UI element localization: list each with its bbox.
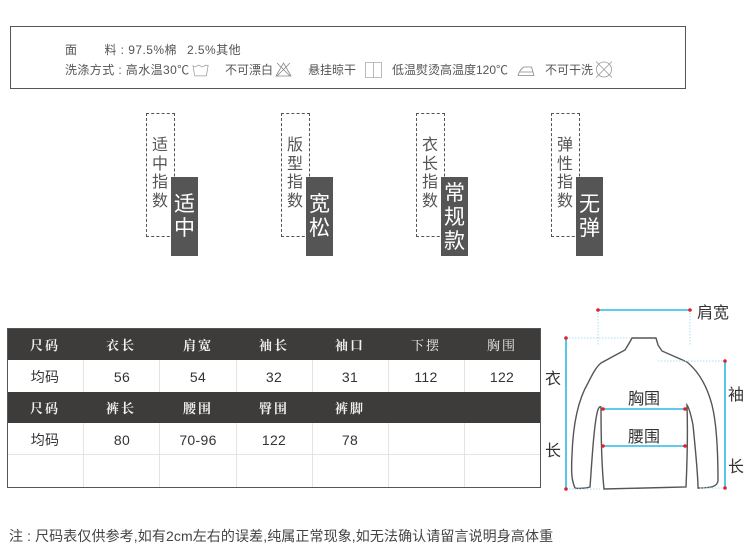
icon: hang dry square xyxy=(365,62,382,78)
index: cut xyxy=(281,113,333,256)
footnote: 注 : 尺码表仅供参考,如有2cm左右的误差,纯属正常现象,如无法确认请留言说明身高体重 xyxy=(9,528,553,544)
labels: 肩宽 xyxy=(697,304,729,322)
elasticity value: 无弹 xyxy=(579,193,600,240)
fabric composition text: 面 料 : 97.5%棉 2.5%其他 xyxy=(65,43,241,57)
labels: 袖 xyxy=(728,386,744,404)
table data row 1: 112 xyxy=(414,369,438,385)
fit value: 适中 xyxy=(174,193,195,240)
table data row 1: 32 xyxy=(266,369,282,385)
table header row 2: 裤长 xyxy=(106,401,136,416)
size table xyxy=(7,328,541,488)
label: no dry clean: 不可干洗 xyxy=(545,63,593,77)
labels: 长 xyxy=(545,442,561,460)
table data row 2 xyxy=(31,432,358,448)
index: elasticity xyxy=(551,113,603,256)
washing method: high water temperature: 洗涤方式 : 高水温30℃ xyxy=(65,63,190,77)
guide dots xyxy=(566,310,725,489)
index: length xyxy=(416,113,468,256)
cut value xyxy=(306,177,333,256)
icon: wash tub xyxy=(192,64,208,76)
labels: 长 xyxy=(728,458,744,476)
table header row 1: 袖长 xyxy=(259,338,289,353)
cut label: 版型指数 xyxy=(287,137,303,210)
elasticity label: 弹性指数 xyxy=(557,137,573,210)
table data row 1: 均码 xyxy=(31,369,59,385)
table data row 2: 78 xyxy=(342,432,358,448)
measurement diagram: jacket xyxy=(545,304,744,491)
table data row 2: 均码 xyxy=(31,432,59,448)
table data row 1: 54 xyxy=(190,369,206,385)
icon: iron xyxy=(518,66,534,76)
table data row 1: 122 xyxy=(490,369,514,385)
table header row 1: 下摆 xyxy=(411,338,441,353)
labels: 衣 xyxy=(545,370,561,388)
table header row 1: 袖口 xyxy=(335,338,365,353)
index: fit xyxy=(146,113,198,256)
table header row 2: 裤脚 xyxy=(335,401,365,416)
table header row 1: 衣长 xyxy=(106,338,136,353)
panel: fabric and washing info xyxy=(10,26,686,89)
table data row 1 xyxy=(31,369,514,385)
table header row 2 xyxy=(7,392,540,423)
table data row 1: 31 xyxy=(342,369,358,385)
label: hang dry: 悬挂晾干 xyxy=(308,63,356,77)
labels: 胸围 xyxy=(628,390,660,408)
labels xyxy=(545,304,744,476)
label: no bleach: 不可漂白 xyxy=(225,63,273,77)
table header row 1: 尺码 xyxy=(30,338,60,353)
length label: 衣长指数 xyxy=(422,137,438,210)
cyan measurement lines xyxy=(566,310,725,489)
table header row 1 xyxy=(7,329,540,360)
table data row 2: 70-96 xyxy=(179,432,217,448)
red end points xyxy=(564,308,727,491)
length value: 常规款 xyxy=(444,182,465,253)
table header row 1: 胸围 xyxy=(487,338,517,353)
label: low temperature ironing: 低温熨烫高温度120℃ xyxy=(392,63,508,77)
icon: no bleach triangle xyxy=(275,62,292,76)
table data row 2: 122 xyxy=(262,432,286,448)
icon: no dry clean circle xyxy=(596,61,612,78)
fit label: 适中指数 xyxy=(152,137,168,210)
table header row 2: 腰围 xyxy=(183,401,213,416)
jacket outline xyxy=(572,338,718,489)
table data row 2: 80 xyxy=(114,432,130,448)
length value xyxy=(441,177,468,256)
table header row 2: 臀围 xyxy=(259,401,289,416)
cut value: 宽松 xyxy=(309,193,330,240)
table header row 2: 尺码 xyxy=(30,401,60,416)
labels: 腰围 xyxy=(628,428,660,446)
elasticity value xyxy=(576,177,603,256)
table data row 1: 56 xyxy=(114,369,130,385)
fit value xyxy=(171,177,198,256)
table header row 1: 肩宽 xyxy=(183,338,213,353)
